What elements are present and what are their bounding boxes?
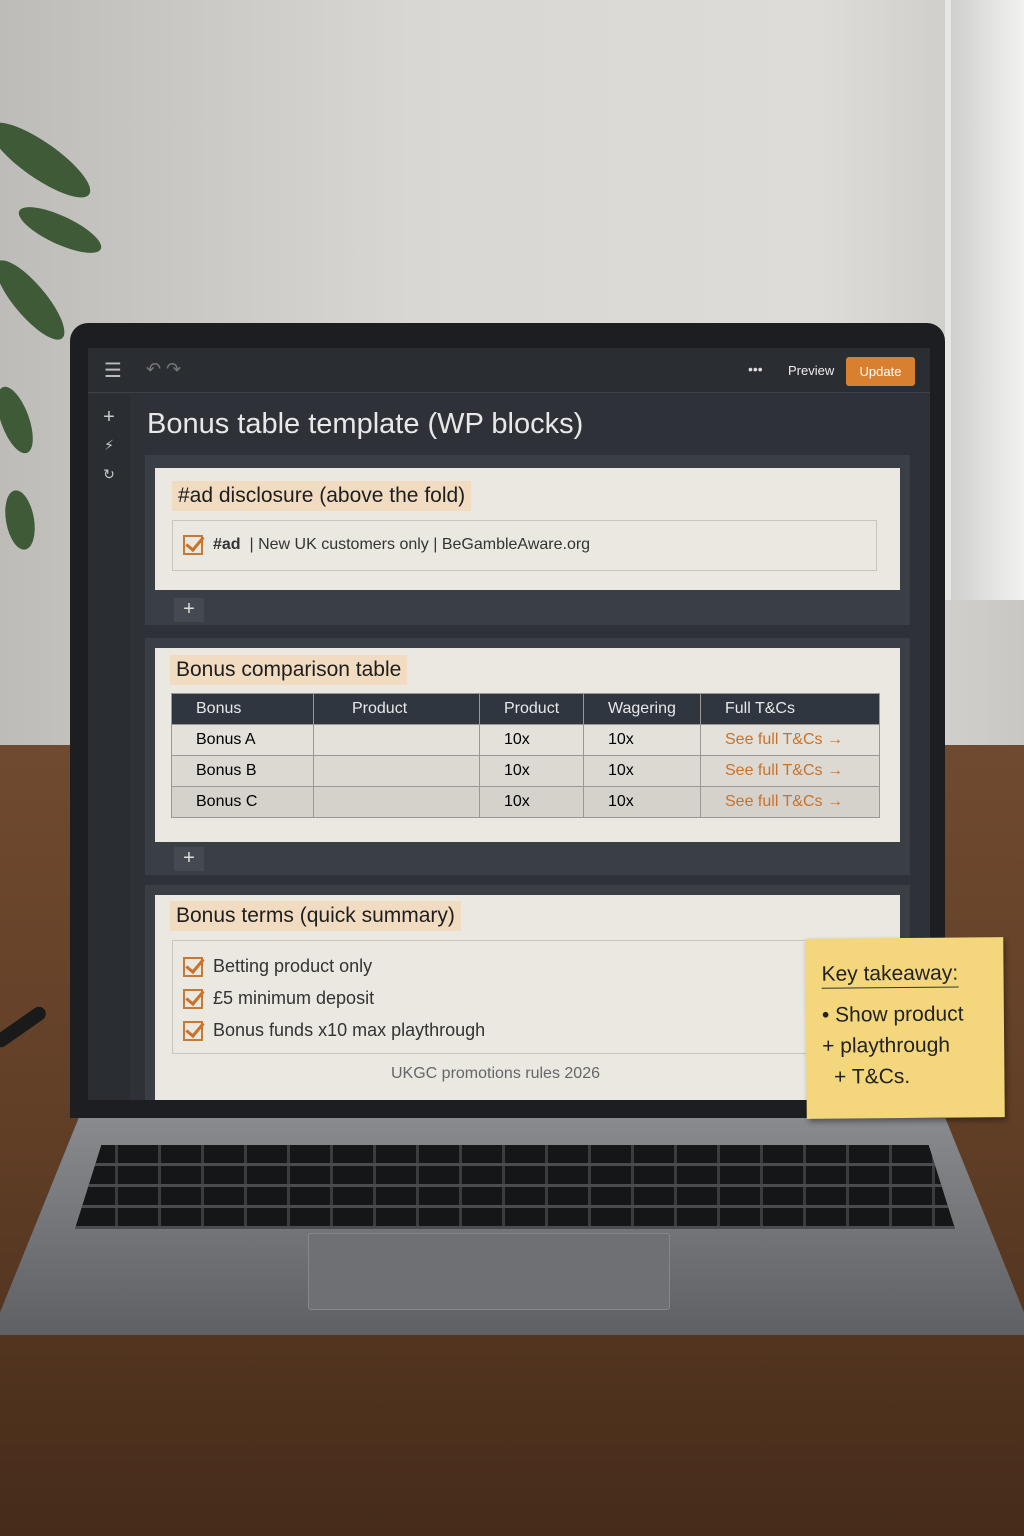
table: 10x: [608, 762, 634, 779]
title: Bonus table template (WP blocks): [147, 408, 583, 440]
disclosure box: [172, 520, 877, 571]
keyboard: [75, 1145, 955, 1229]
table: Bonus C: [196, 793, 257, 810]
table: 10x: [504, 762, 530, 779]
screen: [88, 348, 930, 1100]
table: 10x: [504, 731, 530, 748]
laptop base: [0, 1110, 1024, 1335]
sidebar: +: [103, 406, 115, 428]
panel: comparison table: [145, 638, 910, 875]
table: 10x: [608, 793, 634, 810]
checklist: [172, 940, 812, 1054]
desk: [0, 745, 1024, 1536]
trackpad: [308, 1233, 670, 1310]
table: See full T&Cs →: [725, 731, 843, 748]
table: See full T&Cs →: [725, 762, 843, 779]
sidebar: ⚡: [104, 437, 114, 453]
update button: Update: [860, 364, 901, 379]
checklist: £5 minimum deposit: [213, 988, 374, 1008]
top bar: ↶ ↷: [146, 359, 181, 379]
table: 10x: [504, 793, 530, 810]
disclosure box: #ad | New UK customers only | BeGambleAware.org: [213, 536, 590, 553]
table: 10x: [608, 731, 634, 748]
table: Bonus B: [196, 762, 256, 779]
table: Bonus A: [196, 731, 256, 748]
table: Full T&Cs: [725, 700, 795, 717]
table: Bonus: [196, 700, 241, 717]
checklist: Bonus funds x10 max playthrough: [213, 1020, 485, 1040]
top bar: Preview: [788, 363, 834, 378]
plant: [0, 122, 102, 550]
panel: comparison table: Bonus comparison table: [176, 658, 401, 681]
laptop bezel: [70, 323, 945, 1118]
panel: bonus terms: Bonus terms (quick summary): [176, 904, 455, 927]
window: [945, 0, 1024, 600]
top bar: [88, 348, 930, 393]
table: Product: [352, 700, 407, 717]
update button: [846, 357, 915, 386]
top bar: •••: [748, 361, 763, 377]
table: [171, 693, 880, 818]
checklist: Betting product only: [213, 956, 372, 976]
sticky note: + playthrough: [822, 1034, 950, 1058]
sticky note: Key takeaway:: [821, 962, 958, 986]
panel: bonus terms: [145, 885, 910, 1100]
sticky note: + T&Cs.: [834, 1065, 910, 1089]
sidebar: [88, 394, 130, 1100]
footer note: UKGC promotions rules 2026: [391, 1065, 600, 1082]
sticky note: [805, 937, 1005, 1119]
sidebar: ↻: [103, 466, 115, 482]
heading: #ad disclosure (above the fold): [178, 484, 465, 507]
panel: ad disclosure: [145, 455, 910, 625]
top bar: ☰: [104, 360, 122, 382]
panel: comparison table: +: [183, 847, 195, 869]
sticky note: • Show product: [822, 1002, 964, 1027]
background wall: [0, 0, 1024, 750]
table: See full T&Cs →: [725, 793, 843, 810]
table: Product: [504, 700, 559, 717]
pen: [0, 1004, 49, 1050]
table: Wagering: [608, 700, 676, 717]
panel: ad disclosure: +: [183, 598, 195, 620]
